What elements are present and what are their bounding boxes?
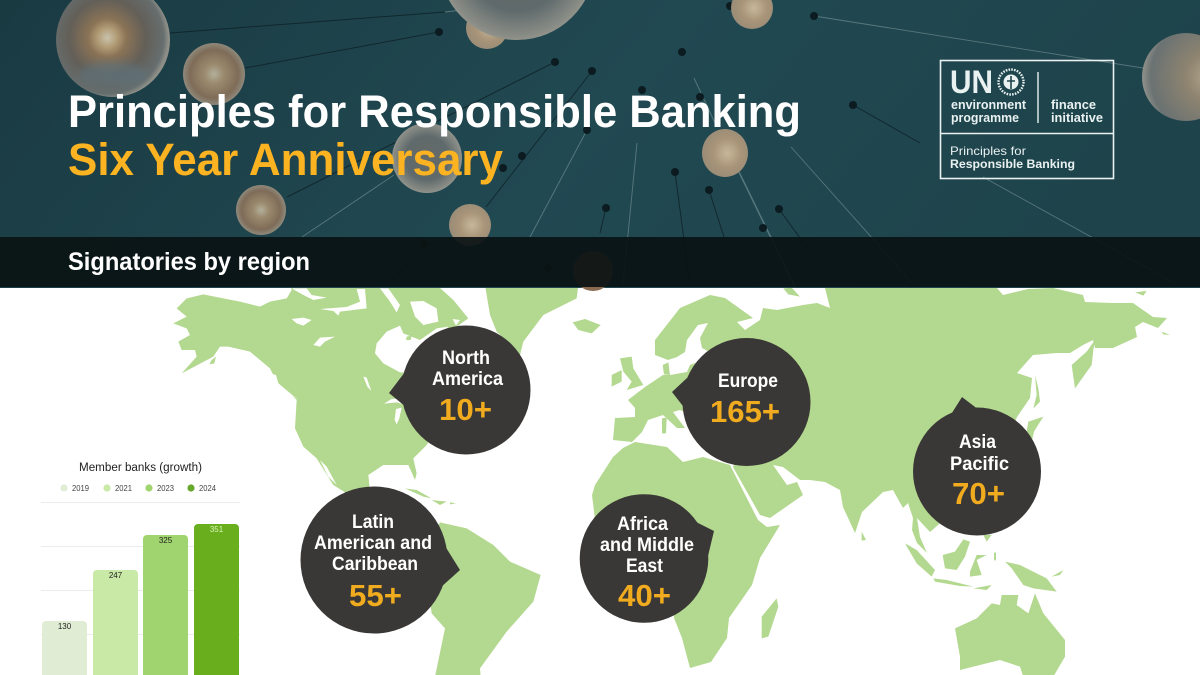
bar 2019 xyxy=(42,621,87,675)
chart legend: 2024 xyxy=(199,484,217,493)
callout: North America: America xyxy=(432,369,503,390)
callout: Africa and Middle East: 40+ xyxy=(618,578,671,613)
world map xyxy=(173,285,1170,675)
map: inland water of North America xyxy=(270,288,460,485)
callout: North America: North xyxy=(442,348,490,369)
map: Southeast Asia, Oceania and Madagascar xyxy=(762,532,1065,675)
dark band xyxy=(0,237,1200,287)
title: Principles for Responsible Banking xyxy=(68,86,801,137)
callout: Asia Pacific: Asia xyxy=(959,432,996,453)
bar 2023: 325 xyxy=(159,536,173,545)
logo: UN Environment Programme Finance Initiative: programme xyxy=(951,111,1019,125)
bar 2023 xyxy=(143,535,188,675)
header photo: threads and pins xyxy=(56,0,1200,291)
bar 2024 xyxy=(194,524,239,675)
bar 2021: 247 xyxy=(109,571,123,580)
logo: UN Environment Programme Finance Initiative: UN xyxy=(950,64,993,100)
callout: Latin America and Caribbean xyxy=(300,486,460,634)
bar 2021 xyxy=(93,570,138,675)
callout: North America xyxy=(389,326,530,454)
bar 2024: 351 xyxy=(210,525,224,534)
callout: Africa and Middle East: and Middle xyxy=(600,535,694,556)
bar 2019: 130 xyxy=(58,622,72,631)
callout: Latin America and Caribbean: Caribbean xyxy=(332,554,418,575)
callout: Africa and Middle East xyxy=(580,494,714,623)
chart legend: 2019 xyxy=(72,484,90,493)
logo: UN Environment Programme Finance Initiative xyxy=(940,60,1114,178)
callout: Latin America and Caribbean: Latin xyxy=(352,512,394,533)
callout: Latin America and Caribbean: American and xyxy=(314,533,432,554)
logo: UN Environment Programme Finance Initiative: environment xyxy=(951,98,1027,112)
callout: North America: 10+ xyxy=(439,392,492,427)
logo: UN Environment Programme Finance Initiative: initiative xyxy=(1051,111,1103,125)
title: Six Year Anniversary xyxy=(68,134,503,185)
map: Greenland, Iceland, Caribbean, South America xyxy=(405,285,601,675)
panel: header xyxy=(0,0,1200,291)
logo: UN Environment Programme Finance Initiative: Responsible Banking xyxy=(950,157,1075,171)
callout: Europe: Europe xyxy=(718,371,778,392)
callout: Asia Pacific: Pacific xyxy=(950,454,1009,475)
callout: Latin America and Caribbean: 55+ xyxy=(349,578,402,613)
callout: Asia Pacific xyxy=(913,397,1041,536)
header background xyxy=(0,0,1200,288)
callout: Asia Pacific: 70+ xyxy=(952,476,1005,511)
chart legend: 2023 xyxy=(157,484,175,493)
callout: Africa and Middle East: East xyxy=(626,556,664,577)
chart legend: 2021 xyxy=(115,484,133,493)
map: North America xyxy=(173,285,468,493)
callout: Africa and Middle East: Africa xyxy=(617,514,668,535)
callout: Europe: 165+ xyxy=(710,394,780,429)
callout: Europe xyxy=(672,338,810,466)
logo: UN Environment Programme Finance Initiative: Principles for xyxy=(950,144,1026,158)
map: Eurasia xyxy=(613,288,1167,553)
title xyxy=(68,86,801,185)
logo: UN Environment Programme Finance Initiative: finance xyxy=(1051,98,1096,112)
icon: UN emblem xyxy=(998,70,1024,94)
map: Africa xyxy=(592,442,780,668)
bar chart: member banks growth xyxy=(41,462,240,675)
section heading: Signatories by region xyxy=(68,248,310,276)
chart legend xyxy=(60,484,217,493)
chart title: Member banks (growth) xyxy=(79,462,202,474)
map: European islands and Asian islands xyxy=(612,288,800,433)
